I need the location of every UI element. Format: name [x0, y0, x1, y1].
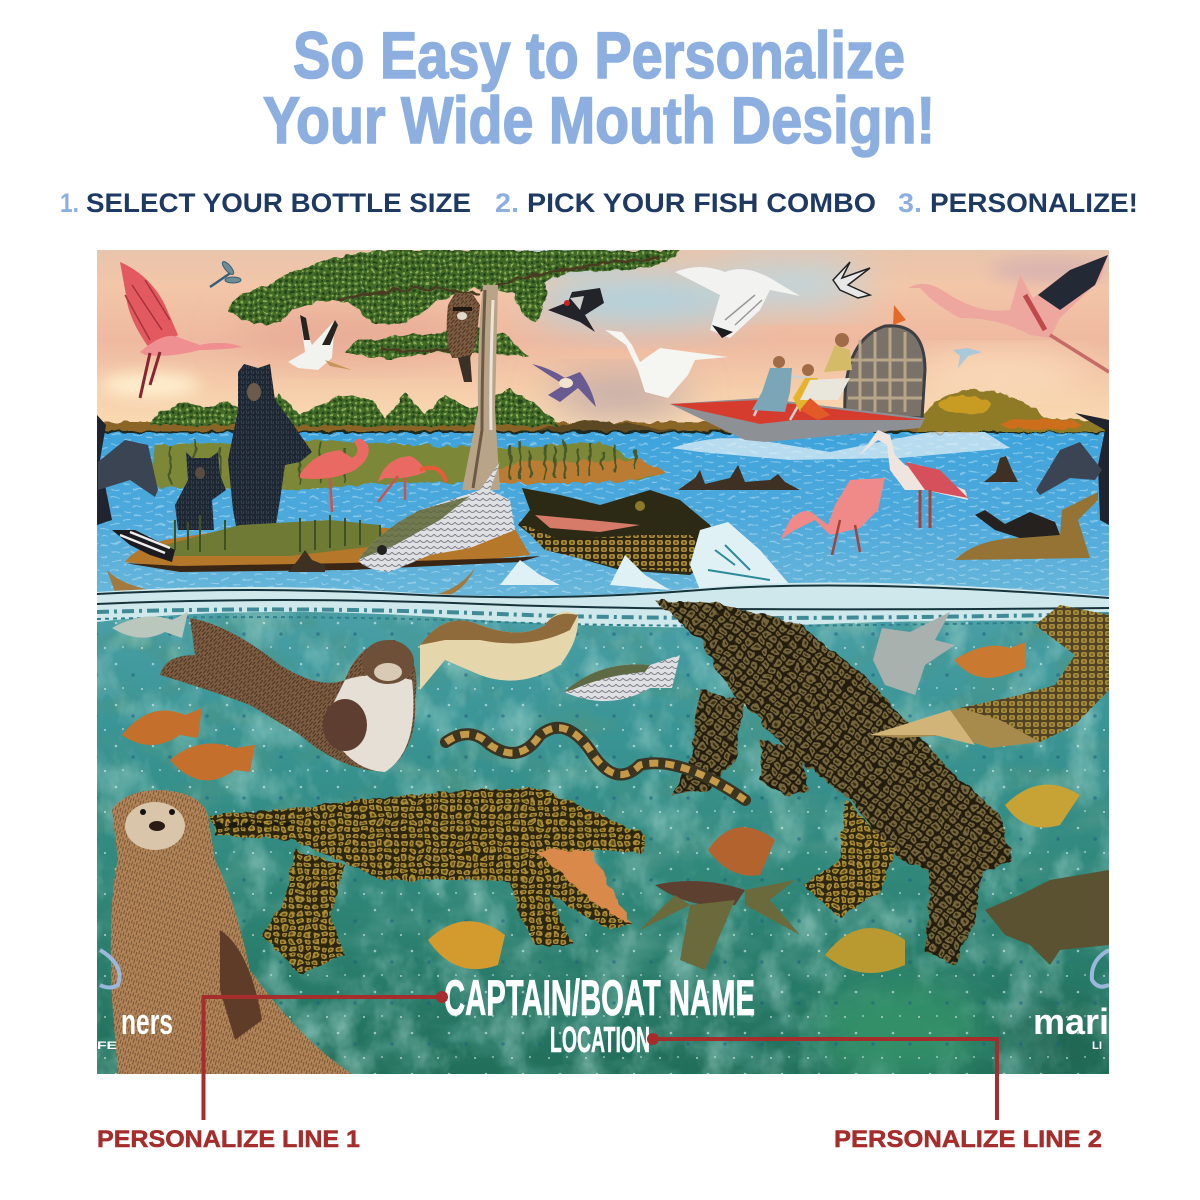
panel: wrap artwork	[90, 246, 1120, 1080]
airboat	[670, 305, 925, 442]
title: Your Wide Mouth Design!	[263, 83, 935, 157]
gull	[953, 348, 982, 368]
sunfish group	[428, 785, 1080, 973]
bottle brand logo right: LI	[1092, 1040, 1102, 1052]
surface foam line	[97, 583, 1109, 627]
bottle brand logo right	[1033, 950, 1109, 1052]
flying spoonbill	[120, 262, 243, 398]
golden alligator	[210, 788, 645, 975]
callout arrow: line 1	[204, 991, 448, 1120]
callout arrow: line 2	[647, 1033, 997, 1120]
wading spoonbills	[780, 430, 968, 555]
left anhinga	[97, 415, 158, 525]
water	[90, 433, 1120, 605]
cypress trunk	[462, 285, 500, 490]
steps row: 2.	[495, 188, 519, 218]
flying flamingo	[908, 255, 1109, 372]
tarpon swimming	[564, 655, 680, 701]
raccoon	[447, 293, 480, 382]
otter at surface	[420, 612, 578, 690]
lower grass island	[125, 515, 540, 572]
large diving alligator	[655, 600, 1012, 965]
steps row: PICK YOUR FISH COMBO	[527, 188, 876, 218]
standing otter	[111, 790, 352, 1074]
water snake	[446, 728, 745, 800]
bottle brand logo right: mari	[1033, 1001, 1109, 1042]
river otter swimming	[160, 618, 416, 772]
painted turtle on log	[955, 492, 1098, 560]
sunfish pair	[122, 708, 255, 780]
woodpecker	[548, 288, 604, 332]
bottle brand logo left: ners	[121, 1001, 173, 1042]
wading flamingos	[300, 439, 446, 512]
upper grass island	[150, 438, 665, 490]
orange island	[918, 390, 1120, 432]
snapping turtle	[985, 870, 1109, 965]
small tarpon	[112, 612, 188, 638]
bottle brand logo left: FE	[97, 1040, 117, 1052]
airboat wake	[672, 432, 1010, 460]
leaping alligator	[518, 488, 722, 575]
steps row	[60, 188, 1138, 218]
label: personalize line 2: PERSONALIZE LINE 2	[834, 1126, 1102, 1153]
ibis	[675, 267, 800, 338]
barn swallow	[532, 364, 596, 407]
bottle brand logo left	[97, 950, 173, 1052]
sky	[97, 246, 1110, 432]
rough-edged scene above water	[90, 250, 1120, 605]
snake pattern	[446, 728, 745, 800]
steps row: PERSONALIZE!	[930, 188, 1138, 218]
underwater background	[97, 608, 1110, 1080]
orange sunfish right	[954, 642, 1026, 678]
splash	[500, 522, 790, 590]
steps row: 3.	[898, 188, 922, 218]
personalized line 1 sample: CAPTAIN/BOAT NAME	[444, 970, 755, 1026]
title: So Easy to Personalize	[293, 18, 905, 92]
steps row: 1.	[60, 188, 79, 218]
silver fish	[873, 612, 955, 695]
cypress knees	[288, 456, 1018, 572]
label: personalize line 1: PERSONALIZE LINE 1	[97, 1126, 360, 1153]
steps row: SELECT YOUR BOTTLE SIZE	[86, 188, 471, 218]
title	[263, 18, 935, 157]
swallow-tailed kite	[833, 262, 870, 298]
soft-shell turtle	[640, 880, 800, 970]
bear cub	[175, 452, 226, 530]
far tree line	[90, 388, 1120, 433]
egret	[605, 330, 728, 398]
dragonfly	[210, 260, 241, 287]
tarpon	[358, 462, 515, 572]
floating leaves	[107, 568, 475, 597]
black bear	[228, 364, 312, 526]
right anhinga	[1036, 413, 1109, 525]
butterfly	[112, 530, 175, 562]
longnose gar	[870, 605, 1109, 748]
personalized line 2 sample: LOCATION	[550, 1019, 650, 1060]
tree canopy	[228, 250, 680, 358]
pelican	[288, 315, 352, 370]
